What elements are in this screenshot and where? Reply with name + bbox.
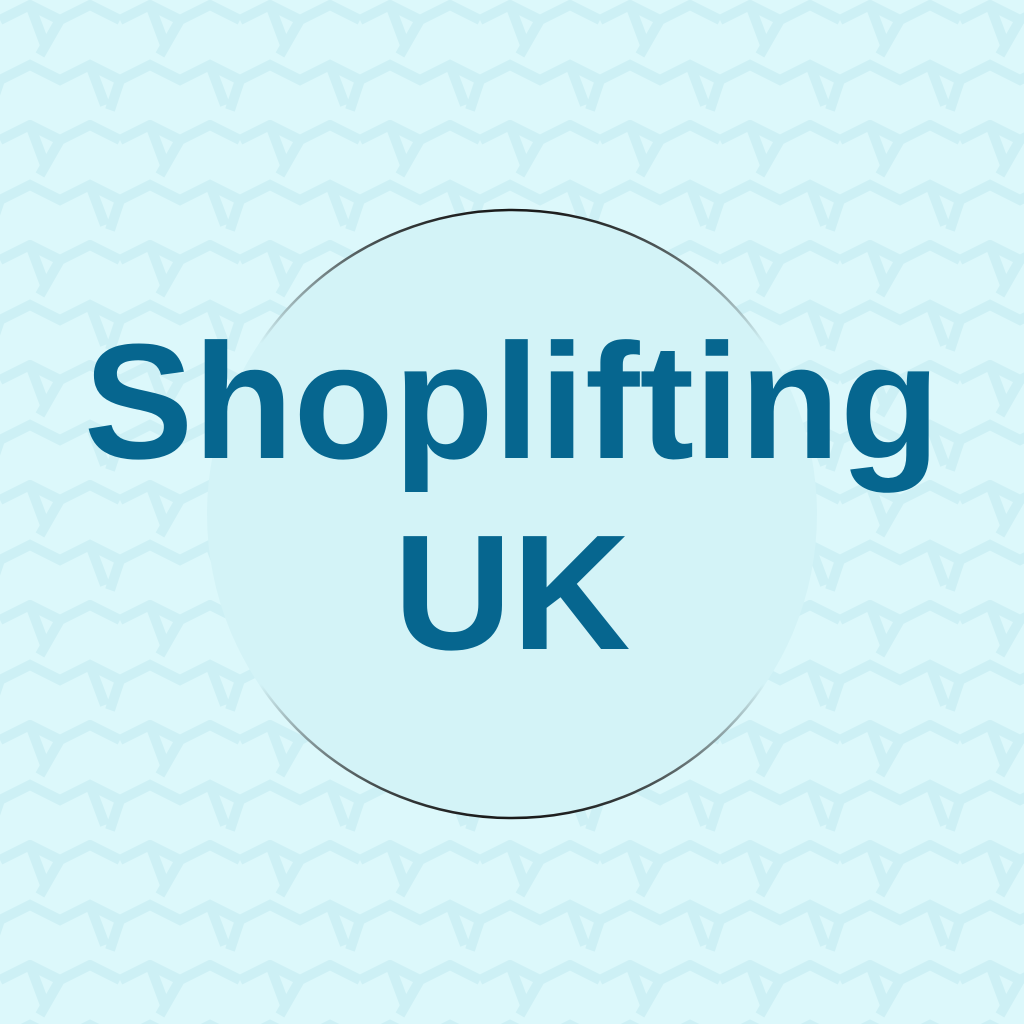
- title line 1: Shoplifting: [84, 310, 940, 493]
- circle panel: [207, 209, 817, 819]
- title line 2: UK: [394, 501, 630, 684]
